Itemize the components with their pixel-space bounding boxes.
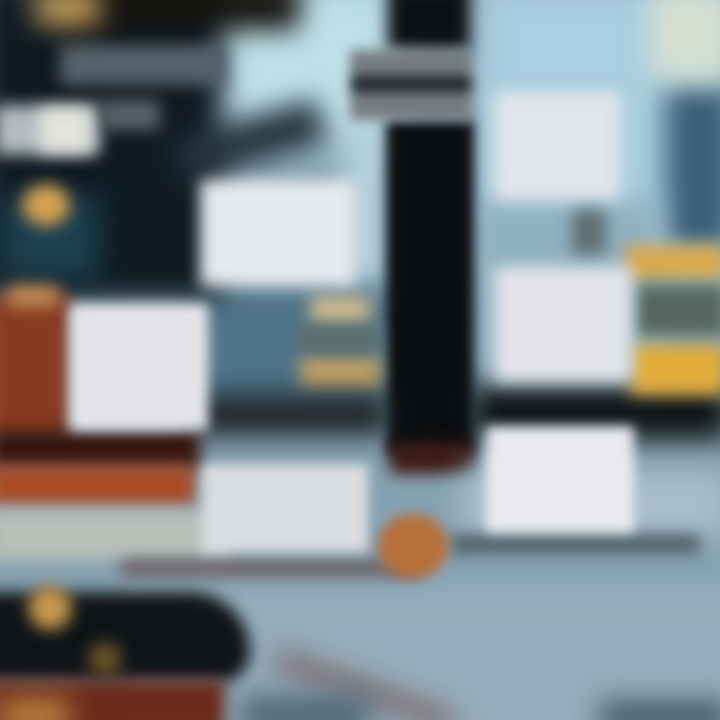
yellow band top right [625,245,720,280]
icon: orange circle [378,514,448,578]
olive middle [300,325,380,353]
panel: card center top [200,180,356,286]
mid strip under band [120,560,420,576]
orange red table [0,465,195,505]
dark bottom left object [0,592,250,682]
panel: card center bottom [202,464,368,552]
dark line right [450,535,700,553]
pale strip [0,510,230,560]
dark beam [172,98,328,184]
panel: card right bottom [486,426,634,532]
dark horizontal band [190,395,390,435]
column base reddish [390,442,474,474]
light: left amber [22,184,70,226]
grey desk surface [120,585,720,720]
olive band right [635,285,720,335]
column white band [350,50,472,120]
dark top band [60,0,300,30]
tan windows middle [300,355,380,390]
light: white glare [40,108,90,152]
light: bottom amber [28,586,72,630]
dark column top [388,0,470,50]
icon: small grey connector [572,210,606,254]
dark left interior [0,0,220,300]
tan block middle [310,295,370,325]
right dark band [470,385,720,440]
panel: card right top [494,92,620,200]
light: bottom small [88,642,122,676]
red-brown left wall [0,295,70,440]
central dark column [386,120,474,455]
bottom right dark corner [600,702,720,720]
grey mid strip [100,100,160,130]
panel: card left [70,304,208,430]
red base bottom left [0,680,225,720]
light: wall amber [8,285,58,307]
yellow band lower right [630,345,720,395]
red curved edge bottom [273,652,457,720]
dark strip bottom [240,695,370,720]
pale right surface [460,470,720,540]
blue-teal glow left [0,195,100,280]
left white strip [0,105,100,155]
panel: card right middle [494,266,632,382]
light: top left [35,0,100,25]
dark table edge left [0,430,200,470]
light: bottom left glow [0,700,70,720]
top left heading bar [60,45,225,85]
